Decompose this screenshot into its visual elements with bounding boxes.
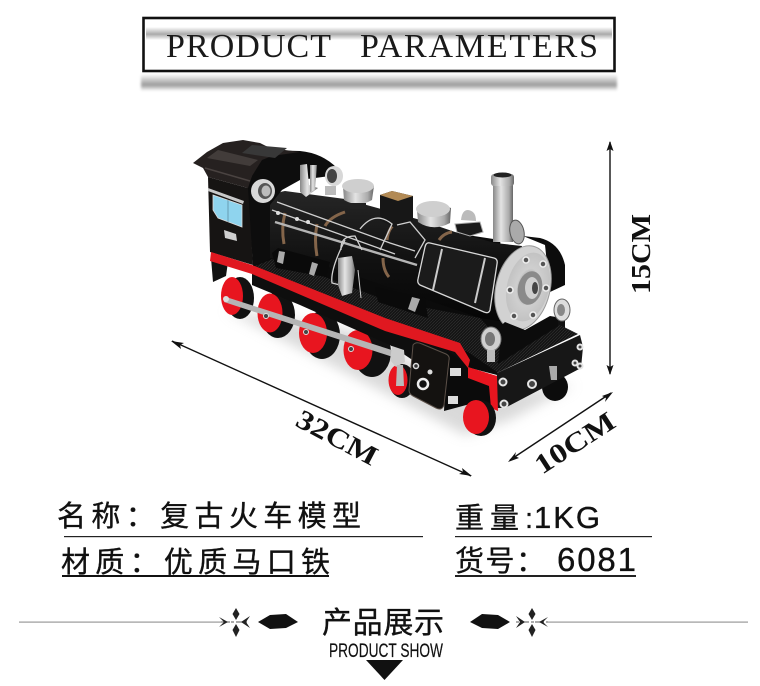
right ornament	[516, 608, 548, 637]
boiler saddle	[480, 316, 566, 372]
cab lamp ring	[251, 179, 275, 203]
cab plate	[224, 230, 237, 241]
black void behind block	[444, 350, 492, 411]
body base silhouette	[253, 205, 510, 375]
cab arched wall	[247, 150, 337, 266]
front deck	[495, 325, 578, 373]
section heading: 产品展示	[322, 607, 444, 640]
steam dome 1	[342, 179, 374, 209]
bronze boiler bands	[283, 212, 452, 277]
front bolts	[500, 344, 582, 408]
deck mesh	[255, 258, 500, 352]
handrails and pipes	[272, 202, 425, 298]
smokebox door	[486, 240, 560, 336]
item number underline	[455, 575, 636, 577]
left line	[19, 622, 221, 623]
right line	[548, 622, 748, 623]
product name row: 名称：复古火车模型	[57, 500, 361, 533]
ground shadow	[225, 310, 575, 435]
sand box	[380, 191, 413, 228]
weight value: 1KG	[534, 500, 600, 535]
item number value: 6081	[557, 541, 636, 578]
cylinder pipes	[272, 248, 428, 318]
chimney	[491, 172, 526, 245]
far front wheel	[542, 373, 568, 401]
steam dome 2	[416, 201, 451, 227]
left diamond	[258, 614, 298, 629]
down triangle	[366, 660, 403, 680]
title text: PRODUCT	[166, 28, 331, 65]
name rule	[64, 536, 423, 537]
boiler panel	[418, 243, 497, 313]
rivets	[276, 211, 310, 224]
left ornament	[219, 608, 250, 637]
under frame	[252, 268, 470, 372]
front left lamp	[481, 327, 501, 362]
width dimension arrow	[508, 392, 613, 462]
driving wheels	[221, 277, 415, 398]
smoke deflector	[523, 236, 565, 292]
label 10CM: 10CM	[529, 406, 621, 480]
valves on cab	[300, 164, 343, 197]
boiler	[266, 191, 522, 322]
label 15CM: 15CM	[626, 214, 656, 294]
cab skirt	[211, 258, 228, 282]
front wheel	[463, 400, 496, 436]
section divider: product show	[19, 607, 748, 680]
connecting rod	[223, 296, 405, 386]
small dome	[455, 210, 483, 236]
label 32CM: 32CM	[291, 404, 383, 472]
cab side	[208, 177, 253, 265]
item number label: 货号：	[455, 545, 545, 578]
weight rule	[455, 536, 652, 537]
red running board	[210, 252, 470, 368]
front lamp right	[554, 299, 570, 328]
locomotive photo illustration	[193, 140, 583, 436]
section subheading: PRODUCT SHOW	[329, 641, 443, 662]
cylinder block	[409, 343, 461, 409]
right diamond	[470, 614, 510, 629]
window	[208, 188, 244, 227]
material row: 材质：优质马口铁	[61, 546, 330, 579]
front beam	[495, 335, 583, 408]
title text: PARAMETERS	[360, 28, 598, 65]
height dimension arrow	[606, 141, 614, 375]
title banner	[141, 18, 617, 91]
red buffer corner	[468, 367, 498, 411]
material underline	[62, 575, 329, 577]
weight label: 重量:	[455, 502, 533, 535]
title text	[166, 28, 598, 65]
silver valve body	[338, 256, 355, 296]
length dimension arrow	[171, 341, 472, 476]
cab roof	[193, 140, 300, 188]
